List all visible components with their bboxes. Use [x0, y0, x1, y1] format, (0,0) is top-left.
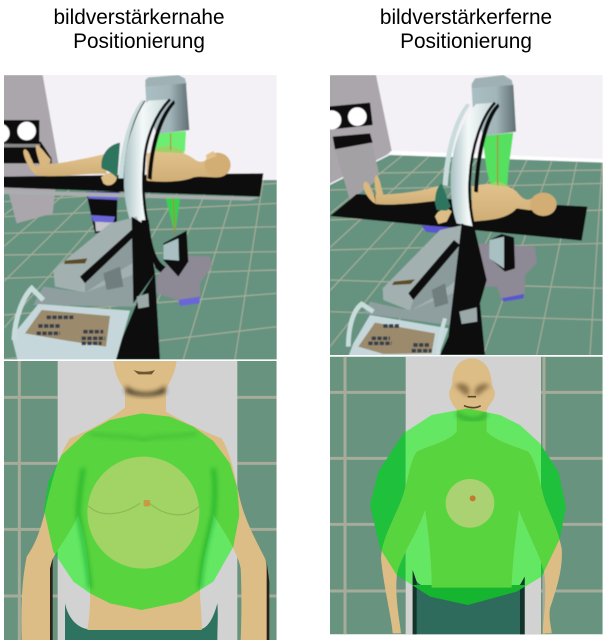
- patient: [23, 143, 231, 185]
- figure inside field: [382, 408, 560, 605]
- title: right column heading: bildverstärkerferne: [380, 6, 552, 29]
- title: left column heading: [53, 6, 225, 53]
- machine housing: [364, 293, 454, 326]
- outer radiation field on background: [44, 460, 233, 594]
- central marker: [470, 495, 476, 501]
- black column: [113, 273, 160, 359]
- table: [0, 173, 263, 197]
- image intensifier: [472, 75, 513, 88]
- title: right column heading: Positionierung: [400, 30, 532, 53]
- machine housing: [33, 267, 155, 307]
- shorts: [65, 603, 218, 640]
- title: right column heading: [380, 6, 552, 53]
- panel: left dose field on patient torso: [4, 361, 277, 640]
- panel: left 3D scene, near positioning: [4, 75, 277, 360]
- shorts: [413, 570, 525, 634]
- c-arm: [118, 100, 145, 178]
- panel: right dose field on patient torso: [330, 357, 603, 634]
- table column: [86, 192, 119, 233]
- central marker: [144, 500, 150, 506]
- control console: [12, 304, 130, 363]
- title: left column heading: Positionierung: [73, 30, 205, 53]
- title: left column heading: bildverstärkernahe: [53, 6, 225, 29]
- panel: right 3D scene, far positioning: [330, 75, 603, 355]
- detector and base: [157, 255, 212, 300]
- c-arm: [443, 103, 470, 186]
- figure inside field: [44, 414, 240, 610]
- outer radiation field on background: [370, 410, 566, 587]
- x-ray beam: [482, 133, 513, 185]
- patient: [363, 175, 557, 224]
- x-ray beam: [154, 131, 186, 152]
- image intensifier: [145, 75, 187, 87]
- figure: [21, 361, 269, 640]
- table: [330, 194, 587, 241]
- figure: [381, 358, 562, 633]
- black column: [440, 223, 487, 355]
- control console: [348, 315, 448, 357]
- detector and base: [477, 243, 537, 300]
- wall unit: [0, 75, 58, 223]
- inner detector field: [87, 457, 199, 569]
- inner detector field: [446, 479, 494, 528]
- wall unit: [330, 75, 392, 184]
